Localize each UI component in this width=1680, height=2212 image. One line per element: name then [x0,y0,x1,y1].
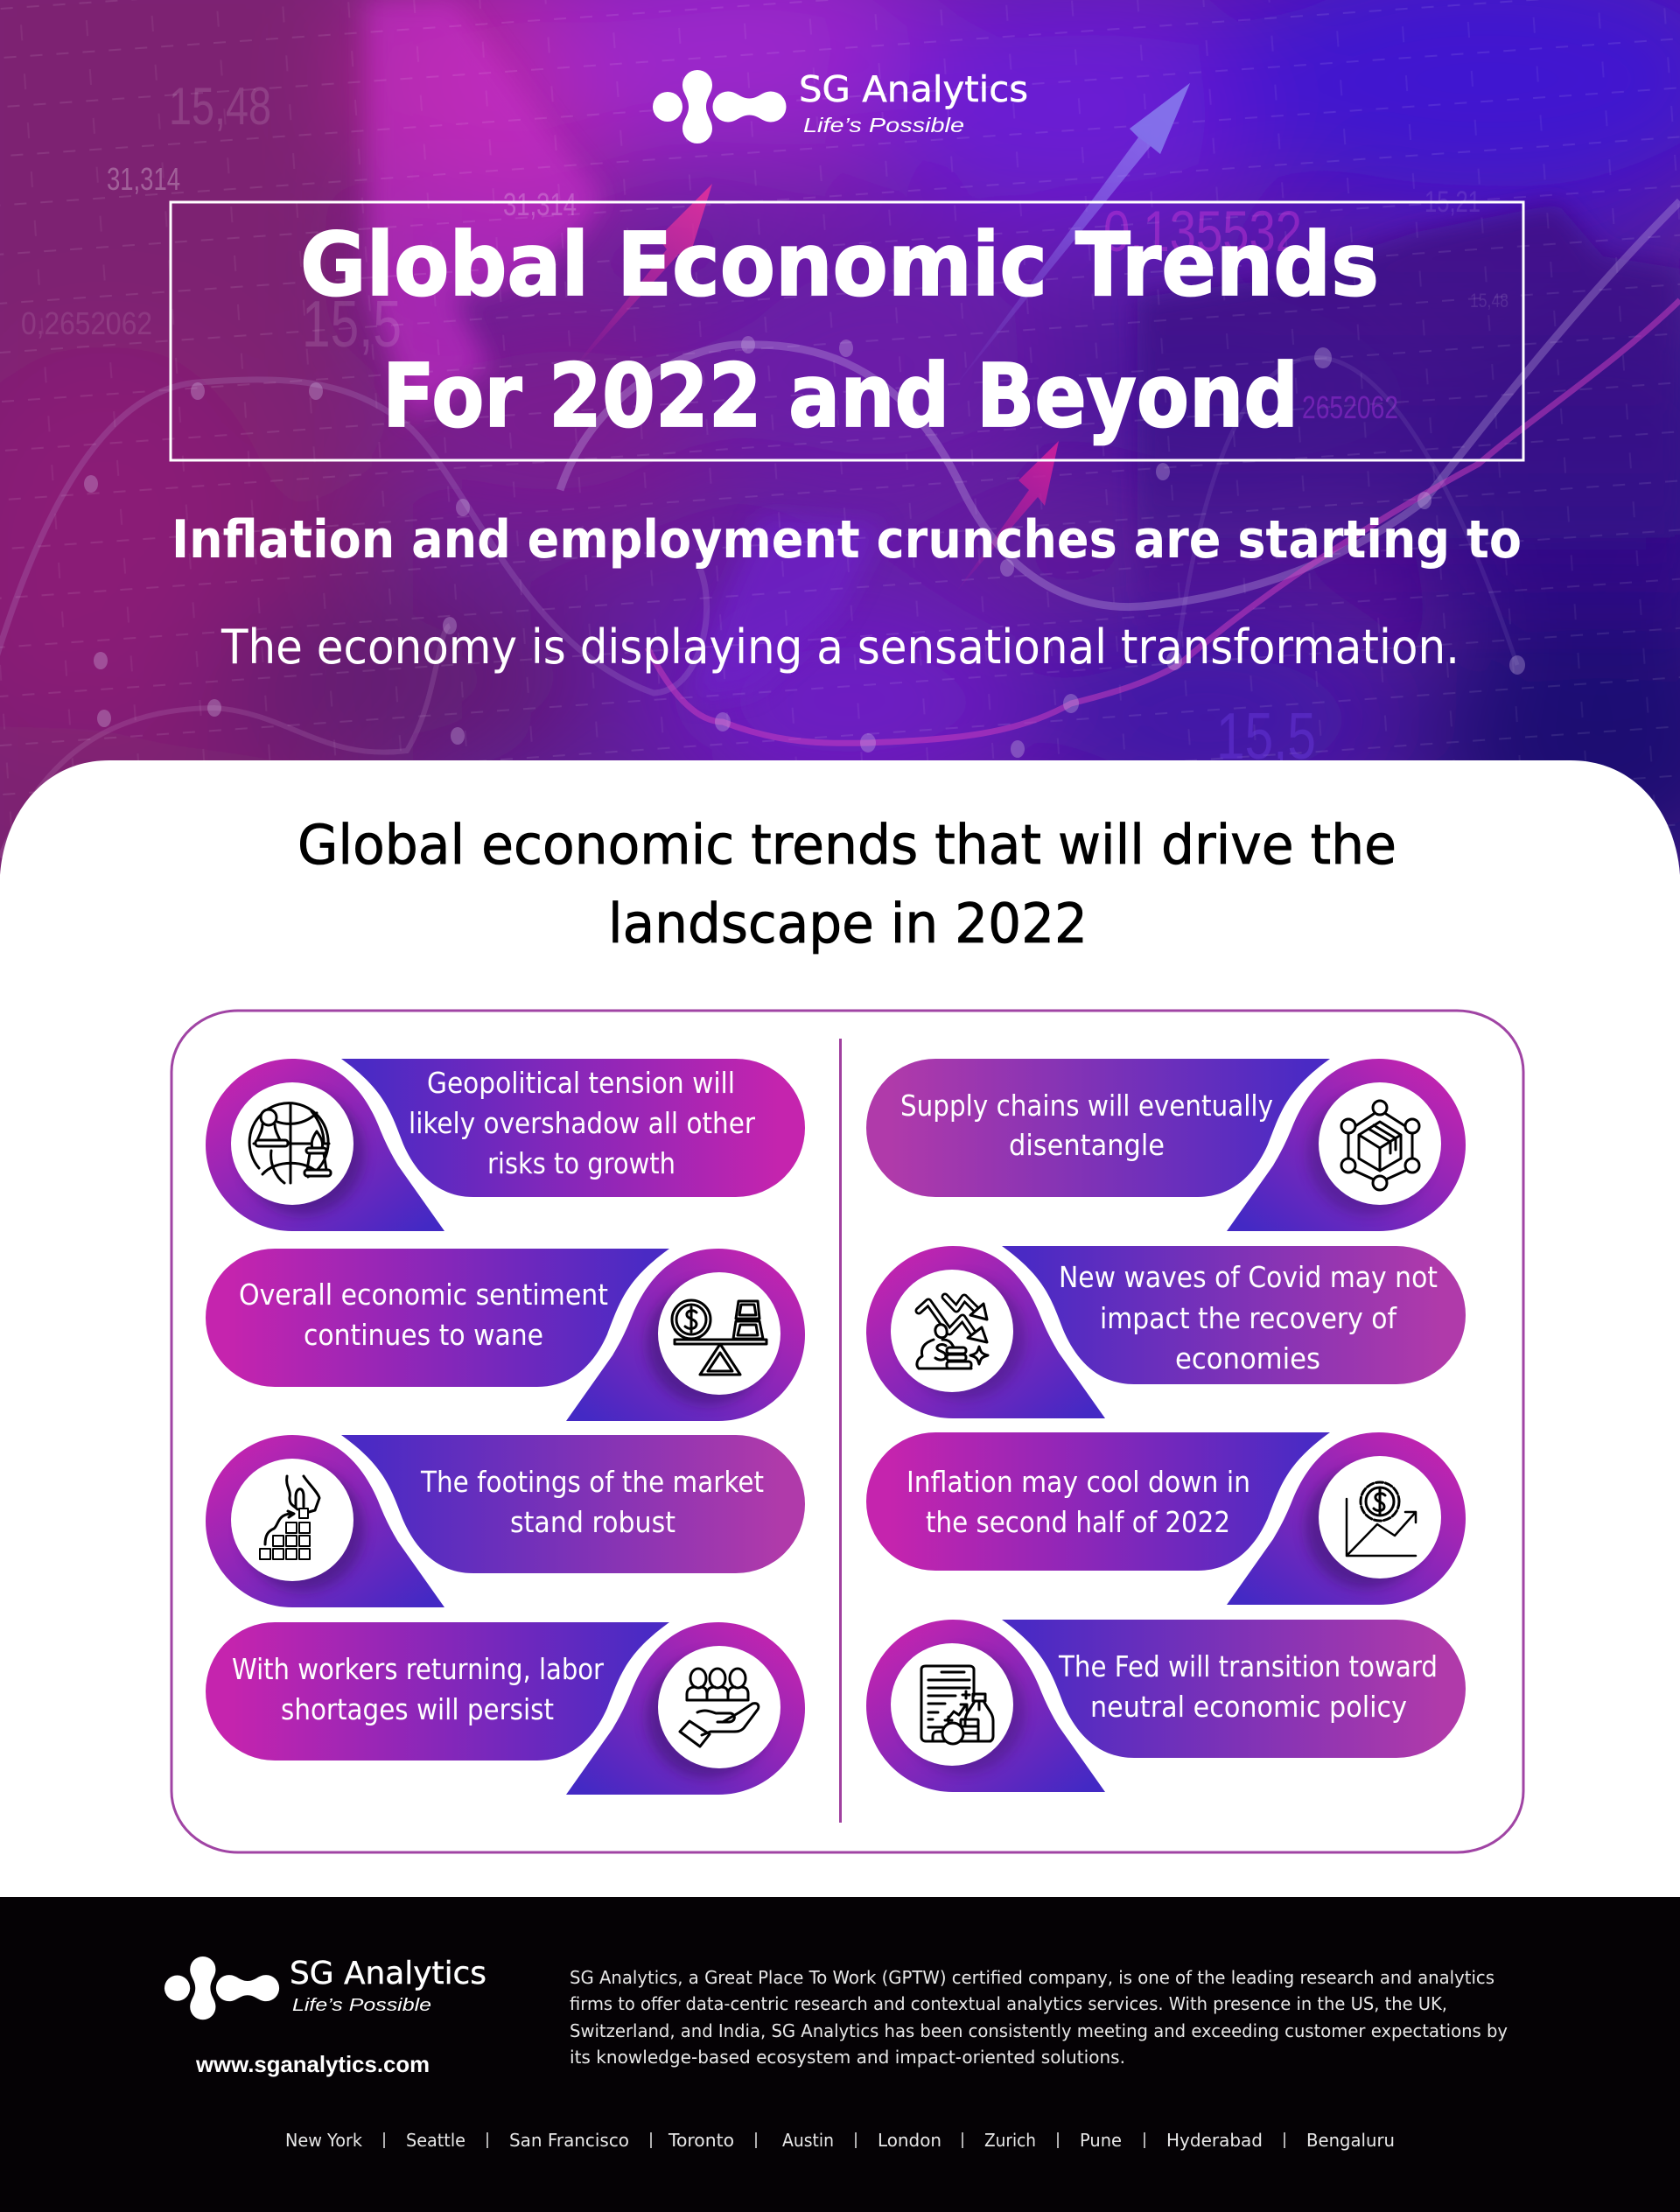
trend text: The Fed will transition toward [1058,1649,1438,1684]
trend text: The footings of the market [420,1465,764,1499]
footer [0,1897,1680,2212]
company description: Switzerland, and India, SG Analytics has been consistently meeting and exceeding customer expectations by [570,2020,1508,2041]
faint market numbers: 15,5 [1216,699,1316,773]
hand silhouette highlight [366,0,604,420]
tagline: The economy is displaying a sensational transformation. [220,620,1460,675]
trend text: Overall economic sentiment [239,1278,608,1312]
trend text: Inflation may cool down in [906,1465,1250,1499]
faint market numbers: 15,21 [1424,186,1480,219]
office locations: Zurich [984,2130,1036,2151]
trend: new waves of Covid [866,1246,1466,1418]
trend: inflation cool down [866,1432,1466,1605]
white content panel [0,760,1680,1897]
trend text [900,1088,1273,1162]
trend text: the second half of 2022 [926,1505,1230,1539]
office locations: London [878,2130,942,2151]
website: www.sganalytics.com [195,2051,430,2077]
trend lines with markers [0,201,1680,858]
title [300,214,1379,447]
section heading [298,813,1396,956]
title box [171,202,1523,460]
office locations: Hyderabad [1166,2130,1263,2151]
office locations: San Francisco [509,2130,629,2151]
trend text: Geopolitical tension will [427,1066,735,1100]
trend text: New waves of Covid may not [1059,1260,1438,1294]
rising arrows [560,83,1190,595]
faint market numbers: 31,314 [503,186,577,222]
title: For 2022 and Beyond [382,345,1298,447]
faint market numbers: 0,135532 [1103,199,1302,263]
company description: SG Analytics, a Great Place To Work (GPTW) certified company, is one of the leading research and analytics [570,1967,1494,1988]
company description [570,1967,1508,2068]
company description: its knowledge-based ecosystem and impact-oriented solutions. [570,2047,1125,2068]
trend text [1058,1649,1438,1724]
section heading: landscape in 2022 [608,892,1088,956]
trend text [420,1465,764,1539]
office locations: Toronto [668,2130,734,2151]
trend text [1059,1260,1438,1376]
trend text: risks to growth [487,1146,676,1180]
footer logo [164,1956,486,2020]
company description: firms to offer data-centric research and contextual analytics services. With presence in the US, the UK, [570,1993,1447,2014]
icon: falling charts and money bag [917,1297,988,1368]
trend text: impact the recovery of [1100,1301,1397,1335]
icon: chart with coin [1347,1482,1416,1556]
faint market numbers: 15,48 [1470,290,1508,312]
faint market numbers: 15,48 [169,77,271,136]
icon: globe with chess pieces [249,1103,331,1183]
trend text [409,1066,755,1180]
office locations [285,2130,1395,2151]
logo: SG Analytics: Life’s Possible [803,114,964,136]
trend text [232,1652,604,1726]
office locations: Seattle [406,2130,466,2151]
faint market numbers: 31,314 [107,161,180,197]
office locations: Pune [1080,2130,1122,2151]
trend text: neutral economic policy [1090,1690,1407,1724]
faint market numbers: 0,2652062 [21,305,152,341]
office locations: Bengaluru [1306,2130,1395,2151]
column divider [839,1039,842,1823]
faint market numbers [21,77,1508,773]
trend text: economies [1175,1341,1320,1376]
icon: package network [1341,1101,1419,1190]
trend text: With workers returning, labor [232,1652,604,1686]
trends panel border [172,1011,1523,1852]
title: Global Economic Trends [300,214,1379,316]
faint market numbers: 2652062 [1302,389,1398,425]
trend text [239,1278,608,1352]
office locations: New York [285,2130,362,2151]
logo: SG Analytics: SG Analytics [799,68,1028,110]
dark silhouette right [1135,196,1675,579]
trend: Geopolitical tension [206,1059,805,1231]
header background [0,0,1680,875]
trend text: likely overshadow all other [409,1106,755,1140]
trend text: disentangle [1009,1128,1165,1162]
section heading: Global economic trends that will drive the [298,813,1396,877]
icon: balance scale with coin and gold bars [672,1300,766,1375]
icon: people in hand [680,1669,759,1746]
icon: stacked blocks and hand [260,1476,319,1559]
trend text: Supply chains will eventually [900,1088,1273,1123]
faint market numbers: 15,5 [302,287,402,360]
lower hand and map tint [691,516,884,700]
trend: Overall economic sentiment [206,1249,805,1421]
trend: Fed transition [866,1620,1466,1792]
trend text: stand robust [510,1505,676,1539]
trend text [906,1465,1250,1539]
footer logo: Life’s Possible [292,1996,431,2015]
footer logo: SG Analytics [290,1956,486,1992]
trend text: continues to wane [304,1318,543,1352]
trend text: shortages will persist [281,1692,554,1726]
trend: footings of the market [206,1435,805,1607]
trend: supply chains [866,1059,1466,1231]
icon: report, bottle and coins [921,1666,993,1744]
office locations: Austin [782,2130,834,2151]
subtitle: Inflation and employment crunches are starting to [172,509,1522,570]
logo: SG Analytics [653,68,1028,144]
trend: labor shortages [206,1622,805,1795]
